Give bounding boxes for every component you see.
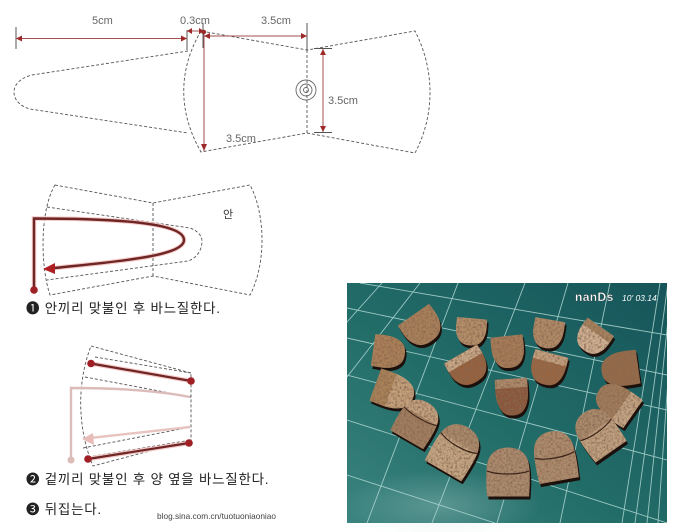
photo: leather pieces on cutting mat — [340, 283, 668, 532]
step 2 caption: ❷ 겉끼리 맞불인 후 양 옆을 바느질한다. — [26, 472, 269, 487]
centre button mark — [296, 80, 316, 100]
photo stamp: nanDs — [575, 290, 614, 304]
folded outline — [81, 346, 191, 466]
dimension labels: 5cm — [92, 15, 113, 27]
red stitch arrow — [30, 218, 184, 294]
step 2 diagram — [68, 346, 195, 466]
seam lines on pieces — [403, 407, 613, 474]
piece shadows — [371, 307, 644, 500]
label: inside: 안 — [223, 208, 233, 221]
dimension labels: 3.5cm — [328, 95, 358, 107]
photo stamp: 10' 03.14 — [622, 293, 657, 303]
folded pattern outline — [43, 185, 262, 295]
photo stamp — [575, 290, 657, 304]
dimension arrows — [16, 23, 332, 151]
side seams — [84, 360, 195, 463]
pattern outline — [14, 31, 430, 153]
cutting mat — [347, 283, 667, 523]
dimension labels: 3.5cm — [226, 133, 256, 145]
pattern diagram with dimensions — [14, 15, 430, 153]
dimension labels — [92, 15, 358, 145]
faded previous stitch — [68, 388, 190, 464]
step 3 caption: ❸ 뒤집는다. — [26, 502, 102, 517]
step 1 caption: ❶ 안끼리 맞불인 후 바느질한다. — [26, 301, 221, 316]
leather pieces — [362, 304, 650, 497]
step 1 diagram — [30, 185, 262, 295]
dimension labels: 3.5cm — [261, 15, 291, 27]
watermark url: blog.sina.com.cn/tuotuoniaoniao — [157, 511, 276, 521]
dimension labels: 0.3cm — [180, 15, 210, 27]
